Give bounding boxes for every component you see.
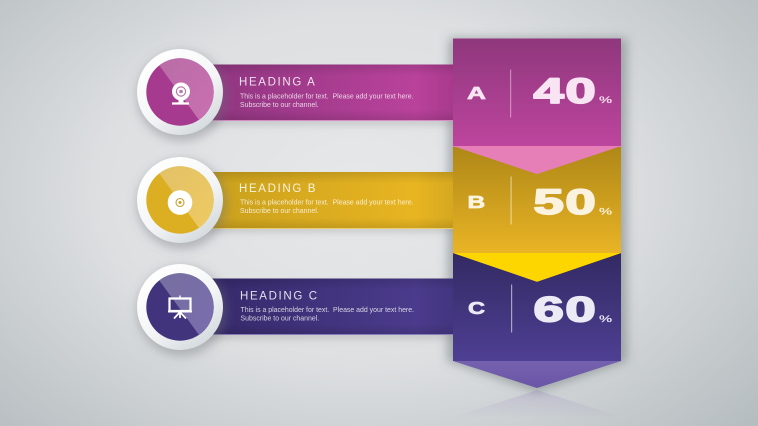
label C: C	[468, 299, 485, 318]
value B: 50	[534, 182, 597, 222]
row C: heading bar	[205, 278, 455, 340]
text block A: This is a placeholder for text. Please add your text here.	[240, 94, 414, 100]
badge C with presentation board icon	[137, 263, 240, 356]
chevron tail	[453, 361, 621, 388]
divider A	[510, 70, 511, 118]
value B: %	[599, 206, 612, 217]
divider B	[510, 176, 512, 224]
pink chevron	[453, 146, 621, 174]
panel A	[453, 38, 621, 174]
text block B: This is a placeholder for text. Please add your text here.	[240, 200, 414, 206]
heading C: HEADING C	[240, 290, 319, 302]
label B: B	[468, 192, 485, 212]
icon: presentation board	[168, 296, 192, 318]
label A: A	[467, 83, 486, 103]
panel C	[453, 253, 621, 388]
value C: %	[599, 314, 612, 324]
badge B with disc icon	[137, 156, 240, 249]
divider C	[511, 284, 512, 332]
text block C: Subscribe to our channel.	[240, 316, 319, 322]
value C: 60	[534, 289, 597, 329]
text block C: This is a placeholder for text. Please add your text here.	[240, 307, 414, 314]
value A: 40	[534, 71, 597, 111]
panel shadow	[447, 38, 627, 392]
icon: disc	[168, 190, 192, 215]
yellow chevron	[453, 253, 621, 282]
text block A: Subscribe to our channel.	[240, 102, 319, 109]
row A: heading bar	[205, 64, 455, 126]
text block B: Subscribe to our channel.	[240, 208, 319, 215]
value A: %	[599, 95, 612, 105]
panel B	[453, 146, 621, 282]
heading B: HEADING B	[239, 183, 317, 195]
reflection of panel tip	[453, 390, 621, 417]
heading A: HEADING A	[239, 76, 316, 88]
badge A with webcam icon	[137, 48, 240, 141]
row B: heading bar	[205, 172, 455, 233]
icon: webcam	[172, 82, 190, 104]
